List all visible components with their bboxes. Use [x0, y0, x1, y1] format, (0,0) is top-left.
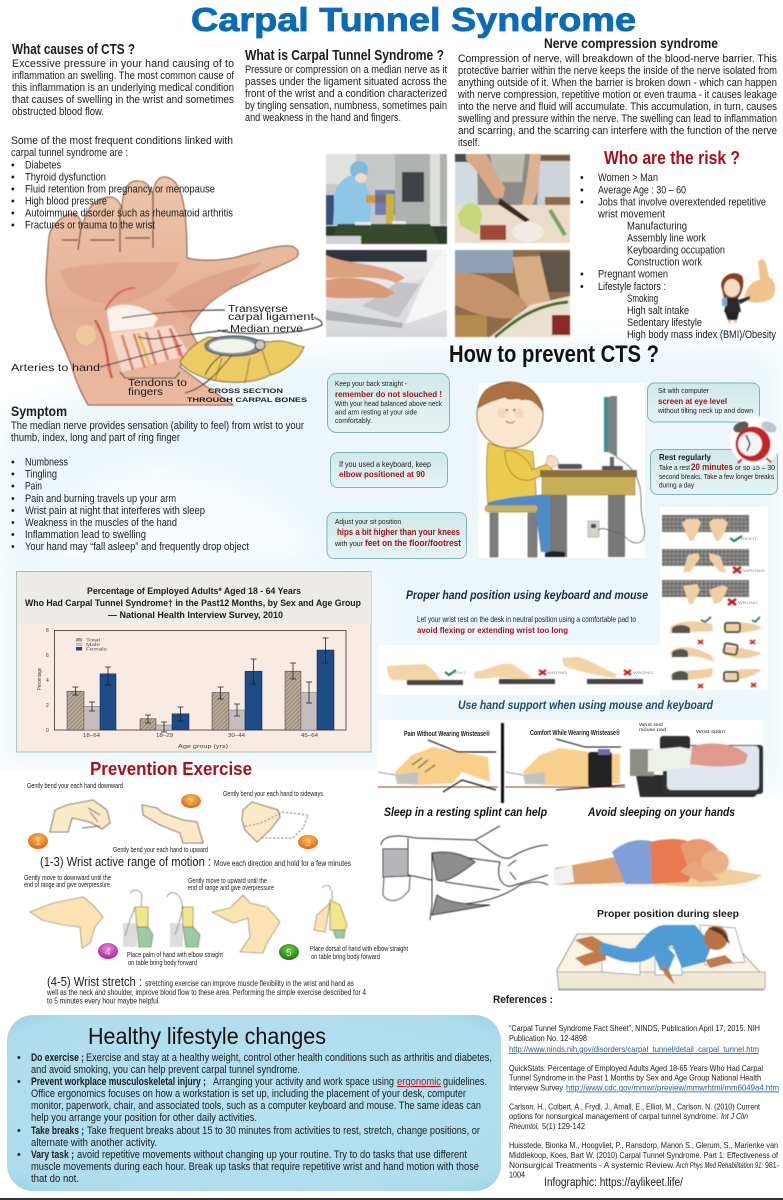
text block: references list: http://www.ninds.nih.gov/disorders/carpal_tunnel/detail_carpal_tunnel.htm [509, 1045, 759, 1054]
chart plot: 8 [46, 628, 49, 634]
illustration: wrist angles above keyboard [378, 645, 660, 695]
text block: symptoms: Tingling [25, 468, 57, 480]
chart plot: 6 [46, 653, 49, 659]
text block: nerve compression syndrome: Nerve compression syndrome [544, 35, 718, 51]
badge 4: 4 [105, 947, 111, 958]
illustration: boy at computer desk [477, 382, 645, 558]
callout: keyboard elbow: If you used a keyboard, keep [339, 460, 431, 469]
captions: Place palm of hand with elbow straight [127, 950, 223, 959]
hands and figures 4-5 [30, 886, 347, 953]
text block: what causes CTS: obstructed blood flow. [12, 106, 104, 118]
heading: how to prevent CTS: How to prevent CTS ? [449, 341, 659, 368]
panel: exercises 1-3 wrist range of motion [27, 781, 351, 869]
text block: what causes CTS: this inflammation is an underlying medical condition [12, 82, 234, 94]
text block: what is carpal tunnel syndrome: passes under the ligament situated across the [245, 76, 447, 88]
illustration: proper sleeping position in bed [557, 925, 765, 990]
badge 4 [98, 943, 118, 959]
text block: references list: Rheumtol, [509, 1122, 539, 1131]
text block: references list: options for nonsurgical management of carpal tunnel syndrome. [509, 1112, 718, 1121]
text block: symptoms: • [11, 480, 15, 492]
text block: references list: Interview Survey [509, 1084, 564, 1092]
callout: rest regularly: 20 minutes [691, 462, 733, 472]
callout: rest regularly: Rest regularly [659, 452, 711, 462]
lifestyle list: avoid repetitive movements without changing up your routine. Try to do tasks that use different [77, 1149, 467, 1161]
label: proper position during sleep: Proper position during sleep [597, 908, 739, 920]
text block: symptoms [11, 403, 304, 553]
captions: on table bring body forward [128, 958, 197, 967]
list: risk factors: Smoking [627, 293, 658, 305]
text block: references list: Nonsurgical Treatments - A systemic Review. [509, 1161, 675, 1170]
heading: who are the risk: Who are the risk ? [604, 148, 740, 168]
exercise 4-5 description: stretching exercise can improve muscle flexibility in the wrist and hand as [145, 979, 354, 988]
list: risk factors: • [580, 281, 584, 293]
callout: screen at eye level: screen at eye level [658, 396, 727, 406]
chart plot: Female [86, 646, 108, 652]
illustration: person sleeping on hands [553, 839, 762, 887]
chart title: — National Health Interview Survey, 2010 [108, 610, 283, 621]
chart title: Who Had Carpal Tunnel Syndrome† in the Past12 Months, by Sex and Age Group [25, 598, 361, 609]
lifestyle list: that do not. [31, 1173, 79, 1185]
text block: what causes CTS: What causes of CTS ? [12, 41, 135, 58]
list: risk factors: Sedentary lifestyle [627, 317, 702, 329]
text block: what causes CTS: that causes of swelling in the wrist and sometimes [12, 94, 234, 106]
text block: nerve compression syndrome [457, 35, 777, 149]
text block: what causes CTS: Fractures or trauma to the wrist [25, 220, 155, 232]
list: risk factors: Pregnant women [598, 268, 668, 280]
callout: screen at eye level: Sit with computer [658, 386, 709, 395]
exercise 1-3 description: (1-3) Wrist active range of motion : [40, 855, 211, 869]
chart plot [37, 628, 346, 750]
text block: symptoms: • [11, 456, 15, 468]
chart plot: 45–64 [301, 733, 318, 739]
pale blue background swooshes [0, 341, 783, 1010]
panel: keyboard and mouse hand posture guide [660, 507, 768, 690]
lifestyle list: Prevent workplace musculoskeletal injury ; [31, 1076, 206, 1088]
text block: what causes CTS: High blood pressure [25, 196, 107, 208]
text block: what is carpal tunnel syndrome [245, 47, 447, 124]
callout: rest regularly: during a day [659, 480, 694, 490]
text block: what is carpal tunnel syndrome: What is Carpal Tunnel Syndrome ? [245, 47, 444, 64]
chart plot: Percentage [37, 668, 43, 690]
captions: end of range and give overpressure [24, 880, 110, 889]
callout: back straight: With your head balanced above neck [335, 399, 442, 408]
text block: symptoms: • [11, 529, 15, 541]
panel: keyboard and mouse hand posture guide: WRONG [743, 569, 765, 573]
panel: keyboard and mouse hand posture guide: WRONG [738, 601, 758, 605]
text block: symptoms: • [11, 493, 15, 505]
heading: sleep in a resting splint: Sleep in a resting splint can help [384, 807, 547, 819]
callout: screen at eye level [648, 383, 760, 422]
lifestyle list: Office ergonomics focuses on how a workstation is set up, including the placement of your desk, computer [31, 1088, 466, 1100]
hand anatomy labels: fingers [128, 387, 163, 398]
icon: cartoon woman thumbs up [721, 259, 775, 323]
illustration: wristease pain versus comfort: Wrist rest [639, 722, 664, 727]
text block: what is carpal tunnel syndrome: front of the wrist and a condition characterized [245, 88, 447, 100]
text block: what causes CTS: Excessive pressure in your hand causing of to [12, 58, 234, 70]
lifestyle list: Take frequent breaks about 15 to 30 minutes from activities to rest, stretch, change positions, or [87, 1125, 480, 1137]
hand anatomy labels: Median nerve [230, 324, 304, 335]
credit line: Infographic: https://aylikeet.life/ [544, 1177, 684, 1189]
hand anatomy labels: THROUGH CARPAL BONES [187, 397, 308, 404]
text block: symptoms: • [11, 468, 15, 480]
list: risk factors: Manufacturing [627, 220, 687, 232]
panel: exercises 4-5 wrist stretch [24, 873, 408, 1006]
text block: what causes CTS [11, 41, 234, 232]
text block: what causes CTS: Some of the most frequent conditions linked with [11, 135, 233, 147]
callout: sit position: hips a bit higher than your knees [337, 527, 460, 537]
illustration: wristease pain versus comfort: mouse pad [639, 727, 667, 732]
text block: references list: 1004 [509, 1170, 525, 1180]
chart title [25, 586, 361, 621]
list: risk factors: • [580, 172, 584, 184]
illustration: hand anatomy with carpal tunnel [46, 177, 322, 405]
panel heading: Healthy lifestyle changes [88, 1023, 326, 1049]
exercise 1-3 description: Move each direction and hold for a few minutes [214, 859, 351, 868]
hand anatomy labels: Transverse [228, 304, 289, 315]
text block: what causes CTS: • [11, 208, 15, 220]
text block: what causes CTS: • [11, 184, 15, 196]
badge 3: 3 [305, 838, 311, 849]
badge 3 [298, 835, 318, 849]
photo: factory assembly worker [326, 154, 447, 244]
text block: what causes CTS: • [11, 172, 15, 184]
captions: on table bring body forward [311, 952, 380, 961]
callout: rest regularly: Take a rest [659, 463, 690, 472]
lifestyle list: • [17, 1125, 21, 1137]
callout: back straight: and arm resting at your side [335, 408, 417, 416]
text block: what is carpal tunnel syndrome: Pressure or compression on a median nerve as it [245, 64, 447, 76]
list: risk factors: Lifestyle factors : [598, 281, 666, 293]
photo: typing on laptop [326, 250, 447, 337]
text block: references list [509, 1024, 779, 1180]
illustration: wristease pain versus comfort: Comfort While Wearing Wristease® [530, 729, 621, 737]
lifestyle list: monitor, paperwork, chair, and associated tools, such as a computer keyboard and mouse. The same ideas can [31, 1100, 481, 1112]
list: risk factors [580, 172, 777, 341]
heading: avoid sleeping on hands: Avoid sleeping on your hands [587, 807, 735, 819]
badge 2: 2 [188, 797, 194, 808]
lifestyle list: Exercise and stay at a healthy weight, control other health conditions such as arthritis and diabetes, [86, 1052, 492, 1064]
lifestyle list: • [17, 1052, 21, 1064]
text: wrist rest advice: avoid flexing or extending wrist too long [417, 625, 568, 635]
heading: proper hand position: Proper hand position using keyboard and mouse [406, 588, 648, 602]
callout: back straight [328, 374, 450, 432]
callout: sit position: with your [334, 539, 364, 548]
captions: Place dorsal of hand with elbow straight [310, 944, 408, 953]
chart plot: 0 [46, 728, 49, 734]
callout: back straight: comfortably. [335, 416, 372, 425]
text block: symptoms: Symptom [11, 403, 67, 419]
exercise 4-5 description: well as the neck and shoulder, improve blood flow to these area. Performing the simple exercise described for 4 [46, 988, 367, 997]
text block: what is carpal tunnel syndrome: and weakness in the hand and fingers. [245, 112, 401, 124]
text block: references list: 981- [765, 1161, 779, 1170]
text block: symptoms: Your hand may “fall asleep” and frequently drop object [25, 541, 249, 553]
list: risk factors: Women > Man [598, 172, 658, 184]
exercise 4-5 description: to 5 minutes every hour maybe helpful. [47, 996, 160, 1006]
callout: rest regularly [650, 450, 778, 494]
title: Carpal Tunnel Syndrome [191, 1, 636, 38]
hand anatomy labels [11, 304, 314, 404]
hand anatomy labels: CROSS SECTION [208, 388, 283, 395]
illustration: wristease pain versus comfort: Pain Without Wearing Wristease® [404, 730, 491, 738]
illustration: wrist angles above keyboard: RIGHT [452, 671, 467, 675]
hand anatomy labels: Tendons to [128, 378, 188, 389]
text block: symptoms: Weakness in the muscles of the hand [25, 517, 177, 529]
captions: Gently bend your each hand to sideways [223, 789, 323, 798]
panel: keyboard and mouse hand posture guide: RIGHT [741, 537, 758, 541]
callout: rest regularly: or so 15 – 30 [735, 463, 775, 472]
exercise 4-5 description [46, 975, 367, 1006]
lifestyle list [17, 1052, 492, 1185]
callout: sit position: feet on the floor/footrest [365, 538, 461, 548]
list: risk factors: Construction work [627, 256, 703, 268]
list: risk factors: Average Age : 30 – 60 [598, 184, 686, 196]
lifestyle list: guidelines. [443, 1076, 487, 1088]
text block: symptoms: Pain and burning travels up your arm [25, 493, 176, 505]
list: risk factors: wrist movement [597, 208, 665, 220]
text block: symptoms: • [11, 541, 15, 553]
text: wrist rest advice [417, 615, 637, 635]
lifestyle list: muscle movements during each hour. Break up tasks that require repetitive wrist and hand motion with those [31, 1161, 479, 1173]
captions: Gently move to upward until the [188, 876, 267, 885]
lifestyle list: and avoid smoking, you can help prevent carpal tunnel syndrome. [31, 1064, 300, 1076]
text block: symptoms: Pain [25, 480, 42, 492]
captions [24, 873, 408, 967]
lifestyle list: Take breaks ; [31, 1125, 84, 1137]
chart plot: 2 [46, 703, 49, 709]
badge 1: 1 [35, 836, 41, 848]
photo: chopping vegetables [455, 154, 570, 243]
text block: references list: http://www.cdc.gov/mmwr/preview/mmwrhtml/mm6049a4.htm [566, 1084, 779, 1092]
list: risk factors: High salt intake [627, 305, 689, 317]
lifestyle list: • [17, 1076, 21, 1088]
text block: nerve compression syndrome: Compression of nerve, will breakdown of the blood-nerve barrier. This [458, 53, 777, 65]
list: risk factors: • [580, 268, 584, 280]
text block: what causes CTS: carpal tunnel syndrome are : [11, 147, 128, 159]
text block: symptoms: Numbness [25, 456, 68, 468]
text block: nerve compression syndrome: itself. [458, 137, 480, 149]
list: risk factors: • [580, 196, 584, 208]
panel: bar chart prevalence of CTS [16, 572, 371, 752]
chart plot: Age group (yrs) [178, 744, 228, 750]
illustration: wristease pain versus comfort: Wrist splint [696, 729, 726, 734]
hand anatomy labels: carpal ligament [228, 312, 314, 323]
captions: Gently bend your each hand downward [27, 781, 123, 790]
chart title: Percentage of Employed Adults* Aged 18 - 64 Years [87, 586, 301, 597]
callout: back straight: Keep your back straight - [335, 379, 407, 388]
text block: symptoms: thumb, index, long and part of ring finger [11, 432, 180, 444]
captions: Gently bend your each hand to upward [113, 845, 208, 854]
photo: hands sewing [455, 250, 570, 337]
badge 5: 5 [286, 948, 292, 959]
illustration: sleeping with wrist splint [381, 826, 548, 920]
text block: references list: 5(1) 129-142 [542, 1122, 585, 1131]
text block: what causes CTS: • [11, 220, 15, 232]
badge 2 [181, 794, 201, 808]
text block: symptoms: • [11, 505, 15, 517]
text block: what causes CTS: Diabetes [25, 160, 61, 172]
icon: alarm clock [730, 416, 780, 466]
hand anatomy labels: Arteries to hand [11, 363, 100, 374]
list: risk factors: Assembly line work [627, 232, 707, 244]
lifestyle list: Arranging your activity and work space using [213, 1076, 394, 1088]
text block: what causes CTS: Autoimmune disorder such as rheumatoid arthritis [25, 208, 233, 220]
badge 1 [28, 833, 48, 849]
text block: symptoms: The median nerve provides sensation (ability to feel) from wrist to your [11, 420, 304, 432]
illustration: wrist angles above keyboard: WRONG [633, 671, 653, 675]
text block: what causes CTS: inflammation an swelling. The most common cause of [12, 70, 234, 82]
text block: references list: Int J Clin [721, 1112, 748, 1121]
hands 1-3 [50, 800, 308, 843]
lifestyle list: Do exercise ; [31, 1052, 84, 1064]
chart plot: Male [86, 642, 101, 647]
callout: back straight: remember do not slouched ! [335, 389, 442, 399]
lifestyle list: • [17, 1149, 21, 1161]
text block: symptoms: Wrist pain at night that interferes with sleep [25, 505, 205, 517]
callout: keyboard elbow [330, 452, 448, 488]
text block: what causes CTS: Thyroid dysfunction [25, 172, 106, 184]
captions: Gently move to downward until the [24, 873, 111, 882]
list: risk factors: Keyboarding occupation [627, 244, 725, 256]
heading: use hand support: Use hand support when using mouse and keyboard [458, 698, 714, 712]
chart plot: 18–64 [83, 733, 100, 739]
chart plot: 30–44 [228, 733, 245, 739]
lifestyle list: alternate with another activity. [31, 1137, 157, 1149]
heading: prevention exercise: Prevention Exercise [90, 759, 252, 779]
captions [27, 781, 323, 854]
badge 5 [279, 944, 299, 960]
lifestyle list: ergonomic [397, 1076, 442, 1088]
chart plot: Total [86, 638, 100, 642]
text block: symptoms: Inflammation lead to swelling [25, 529, 146, 541]
heading: references: References : [493, 994, 553, 1006]
exercise 4-5 description: (4-5) Wrist stretch : [47, 975, 142, 989]
text block: what causes CTS: • [11, 196, 15, 208]
callout: sit position [327, 512, 466, 558]
text: wrist rest advice: Let your wrist rest on the desk in neutral position using a comfortable pad to [417, 615, 637, 624]
captions: end of range and give overpressure [188, 883, 274, 892]
text block: what causes CTS: • [11, 160, 15, 172]
text block: what is carpal tunnel syndrome: by tingling sensation, numbness, sometimes pain [245, 100, 447, 112]
text block: references list: Publication No. 12-4898 [509, 1034, 587, 1043]
panel: healthy lifestyle changes [7, 1015, 501, 1191]
list: risk factors: • [580, 184, 584, 196]
callout: keyboard elbow: elbow positioned at 90 [339, 469, 425, 479]
chart plot: 18–29 [156, 733, 173, 739]
text block: what causes CTS: Fluid retention from pregnancy or menopause [25, 184, 215, 196]
illustration: wristease pain versus comfort [378, 720, 763, 803]
exercise 1-3 description [40, 855, 351, 869]
chart plot: 4 [46, 678, 49, 684]
callout: screen at eye level: without tilting neck up and down [657, 406, 753, 415]
lifestyle list: Vary task ; [31, 1149, 74, 1161]
callout: sit position: Adjust your sit position [335, 517, 401, 526]
illustration: wrist angles above keyboard: WRONG [547, 671, 567, 675]
lifestyle list: help you arrange your position for other daily activities. [31, 1112, 257, 1124]
text block: symptoms: • [11, 517, 15, 529]
